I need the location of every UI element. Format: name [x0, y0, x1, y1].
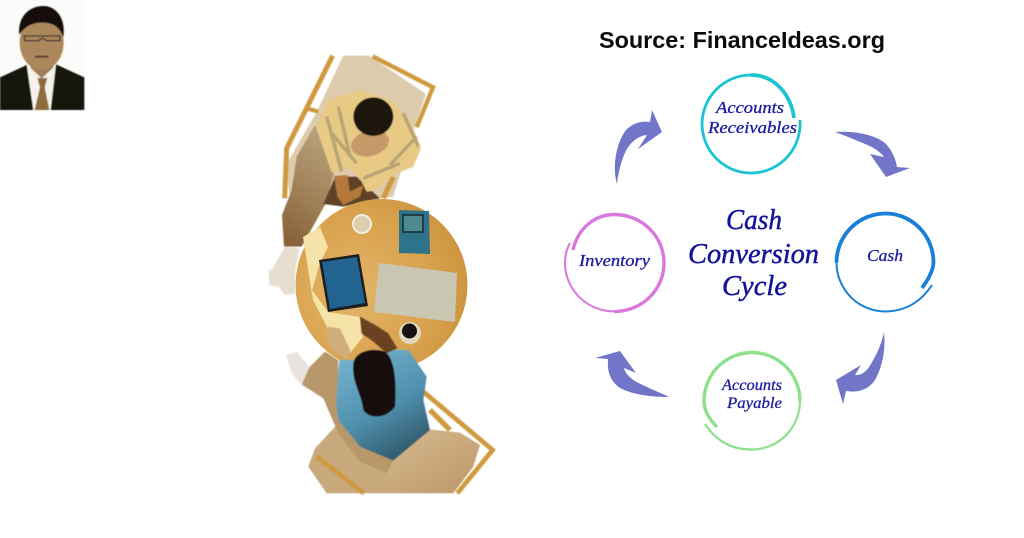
ring: [704, 352, 800, 450]
teal notebook: [399, 210, 430, 254]
label: Accounts: [721, 377, 782, 394]
man's chair frame: [285, 56, 433, 198]
woman's sweater: [336, 350, 430, 461]
author headshot photo: [0, 0, 84, 110]
cycle node: cash: [836, 214, 934, 312]
shirt: [27, 65, 56, 110]
center title: cash conversion cycle: [688, 205, 819, 302]
neck: [31, 55, 53, 82]
arrow: payable to inventory: [595, 351, 669, 397]
tie: [35, 78, 49, 110]
center title: cash conversion cycle: Cash: [726, 205, 782, 236]
woman's trousers: [300, 352, 393, 473]
suit left: [0, 65, 33, 110]
man's face: [348, 126, 392, 161]
cycle node: accounts receivables: [702, 75, 800, 173]
arrow: cash to payable: [836, 332, 885, 404]
coffee cup: [399, 322, 421, 344]
man's hair: [353, 97, 393, 136]
woman's left cushion: [308, 425, 388, 493]
photo: meeting at round table, top half: [269, 56, 433, 280]
tablet: [319, 254, 368, 312]
arrow: inventory to receivables: [615, 110, 662, 184]
man's trousers: [282, 125, 334, 247]
arrow: receivables to cash: [835, 132, 910, 177]
woman's right hand: [360, 317, 397, 353]
shirt stripes: [327, 107, 418, 178]
laptop: [374, 263, 457, 322]
cycle node: accounts payable: Payable: [726, 395, 782, 412]
woman's shoe: [286, 352, 309, 385]
man's lap shadow: [323, 177, 380, 207]
ring: [702, 75, 800, 173]
ring: [565, 214, 664, 312]
woman's hair: [353, 350, 396, 417]
woman's left hand: [326, 327, 350, 360]
man's shirt: [316, 90, 421, 192]
man's shoe tip: [269, 270, 295, 295]
glass of water: [353, 215, 371, 233]
headshot figure: [0, 6, 84, 110]
center title: cash conversion cycle: Cycle: [722, 271, 787, 302]
face: [20, 15, 64, 70]
woman's right cushion: [375, 429, 480, 493]
cycle node: accounts payable: [704, 352, 800, 450]
man's chair cushion: [286, 56, 426, 203]
source heading: Source: FinanceIdeas.org: [599, 27, 885, 53]
label: Accounts: [715, 98, 784, 117]
photo: meeting at round table, bottom half: [269, 270, 493, 493]
label: Inventory: [578, 251, 651, 270]
center title: cash conversion cycle: Conversion: [688, 239, 819, 270]
woman's chair frame: [423, 392, 493, 493]
sunlight on table: [303, 227, 363, 353]
label: Cash: [867, 246, 903, 265]
man's hands: [334, 175, 363, 205]
cycle node: inventory: [565, 214, 664, 312]
cycle node: accounts receivables: Receivables: [707, 118, 797, 137]
table items: [319, 210, 457, 344]
glasses: [24, 36, 60, 41]
mouth: [35, 54, 48, 60]
woman's chair arm: [317, 457, 364, 493]
ring: [836, 214, 934, 312]
suit right: [51, 64, 84, 110]
hair: [19, 6, 64, 37]
man's shoe: [269, 247, 299, 280]
round wooden table: [296, 199, 468, 371]
